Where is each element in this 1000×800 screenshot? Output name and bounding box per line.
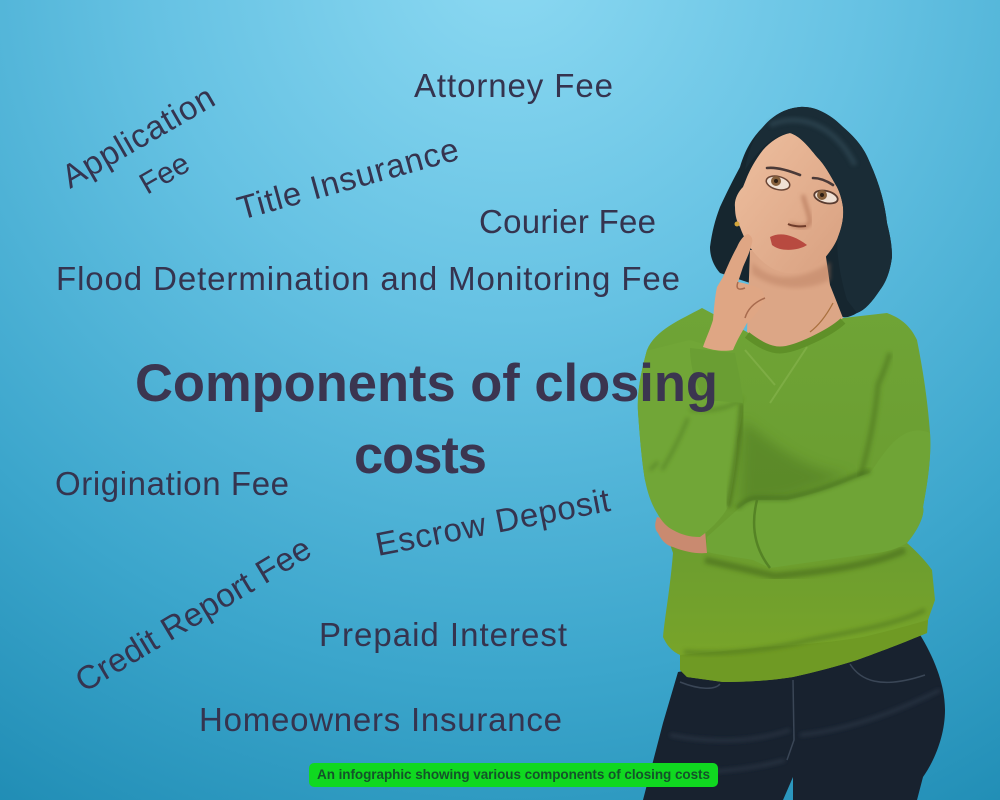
title — [135, 354, 718, 485]
label: Attorney Fee: Attorney Fee — [414, 67, 613, 104]
title: Components of closing — [135, 354, 718, 413]
label: Prepaid Interest: Prepaid Interest — [319, 616, 567, 653]
brows — [767, 168, 833, 185]
jeans — [643, 630, 945, 800]
hair fringe — [745, 107, 892, 313]
nose — [790, 195, 810, 227]
chest seam — [745, 347, 807, 403]
caption badge: An infographic showing various components of closing costs — [317, 767, 710, 782]
face — [735, 133, 843, 273]
label: Homeowners Insurance: Homeowners Insurance — [199, 701, 562, 738]
eyes — [765, 174, 839, 206]
folded forearm — [707, 430, 930, 568]
raised upper arm — [638, 340, 743, 537]
right sleeve inner fold — [860, 353, 890, 478]
back hair — [710, 107, 892, 317]
necklace — [810, 303, 833, 332]
label: Origination Fee: Origination Fee — [55, 465, 289, 502]
neck — [747, 250, 843, 347]
forearm cuff line — [754, 500, 770, 568]
sweater hem — [680, 620, 928, 682]
shadow under forearm — [705, 550, 905, 576]
cuff — [690, 348, 743, 403]
raised arm edge shadow — [728, 403, 742, 507]
woman photo illustration — [638, 107, 945, 800]
label: Title Insurance: Title Insurance — [233, 130, 463, 227]
mouth — [770, 234, 807, 250]
label: Escrow Deposit: Escrow Deposit — [372, 481, 613, 563]
collar — [747, 321, 843, 350]
sweater body — [638, 308, 935, 682]
label: Courier Fee: Courier Fee — [479, 203, 656, 240]
body shading — [740, 420, 850, 505]
finger crease — [737, 282, 765, 318]
hem shadow — [684, 610, 925, 653]
earring — [734, 222, 740, 226]
hand — [703, 234, 765, 351]
caption badge — [309, 763, 718, 787]
label: Credit Report Fee: Credit Report Fee — [69, 529, 317, 699]
label: Flood Determination and Monitoring Fee: Flood Determination and Monitoring Fee — [56, 260, 680, 297]
hand under arm — [655, 517, 707, 553]
title: costs — [354, 426, 487, 485]
label: Application Fee: Application — [55, 78, 221, 195]
arm fold shadows — [650, 398, 742, 470]
label: Application Fee: Fee — [134, 147, 195, 201]
shadow above forearm — [737, 471, 870, 508]
neck shadow — [752, 262, 830, 288]
hair sheen — [770, 120, 855, 165]
